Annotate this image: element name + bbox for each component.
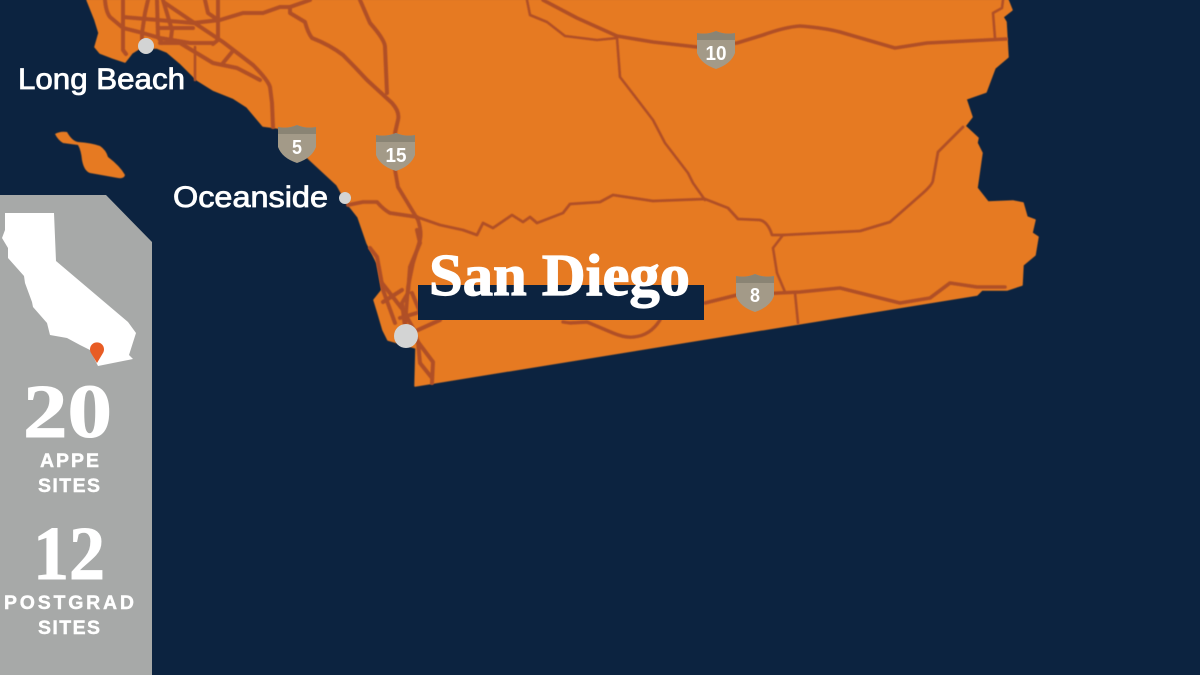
I-15 south xyxy=(395,170,421,327)
Los Angeles freeways xyxy=(105,0,398,133)
shield: I-8 xyxy=(736,274,774,312)
shield: I-10 xyxy=(697,31,735,69)
island: Santa Catalina xyxy=(55,132,125,178)
shield: I-8: 8 xyxy=(750,285,760,307)
label: APPE: APPE xyxy=(40,450,99,472)
Oceanside road xyxy=(348,202,417,217)
highway network xyxy=(105,0,1006,383)
shield: I-5: 5 xyxy=(292,137,302,159)
icon: location pin xyxy=(90,342,104,363)
shield: I-15: 15 xyxy=(386,145,406,167)
road south of title xyxy=(563,320,660,337)
marker: Long Beach xyxy=(138,38,154,54)
label: SITES: SITES xyxy=(38,475,100,497)
marker: San Diego xyxy=(394,324,418,348)
icon: California outline xyxy=(2,213,136,366)
I-10 xyxy=(543,0,1006,48)
label: POSTGRAD: POSTGRAD xyxy=(4,592,134,614)
title bar xyxy=(418,285,704,320)
label: SITES (postgrad): SITES xyxy=(38,617,100,639)
shield: I-15 xyxy=(376,133,415,171)
land: southern California xyxy=(87,0,1038,386)
panel background xyxy=(0,195,152,675)
shield: I-5 xyxy=(278,125,316,163)
connecting roads in the desert xyxy=(527,0,1003,323)
label: Long Beach: Long Beach xyxy=(18,63,185,96)
shield: I-10: 10 xyxy=(706,43,726,65)
San Diego freeways xyxy=(370,230,440,383)
road: eastward SR-78 and 86 xyxy=(417,127,963,235)
I-8 xyxy=(705,283,1005,303)
marker: Oceanside xyxy=(339,192,351,204)
label: Oceanside: Oceanside xyxy=(173,181,328,214)
stat: 12: 12 xyxy=(33,512,105,596)
title: San Diego: San Diego xyxy=(429,242,690,308)
stat: 20: 20 xyxy=(23,370,112,454)
panel: site counts xyxy=(0,195,152,675)
